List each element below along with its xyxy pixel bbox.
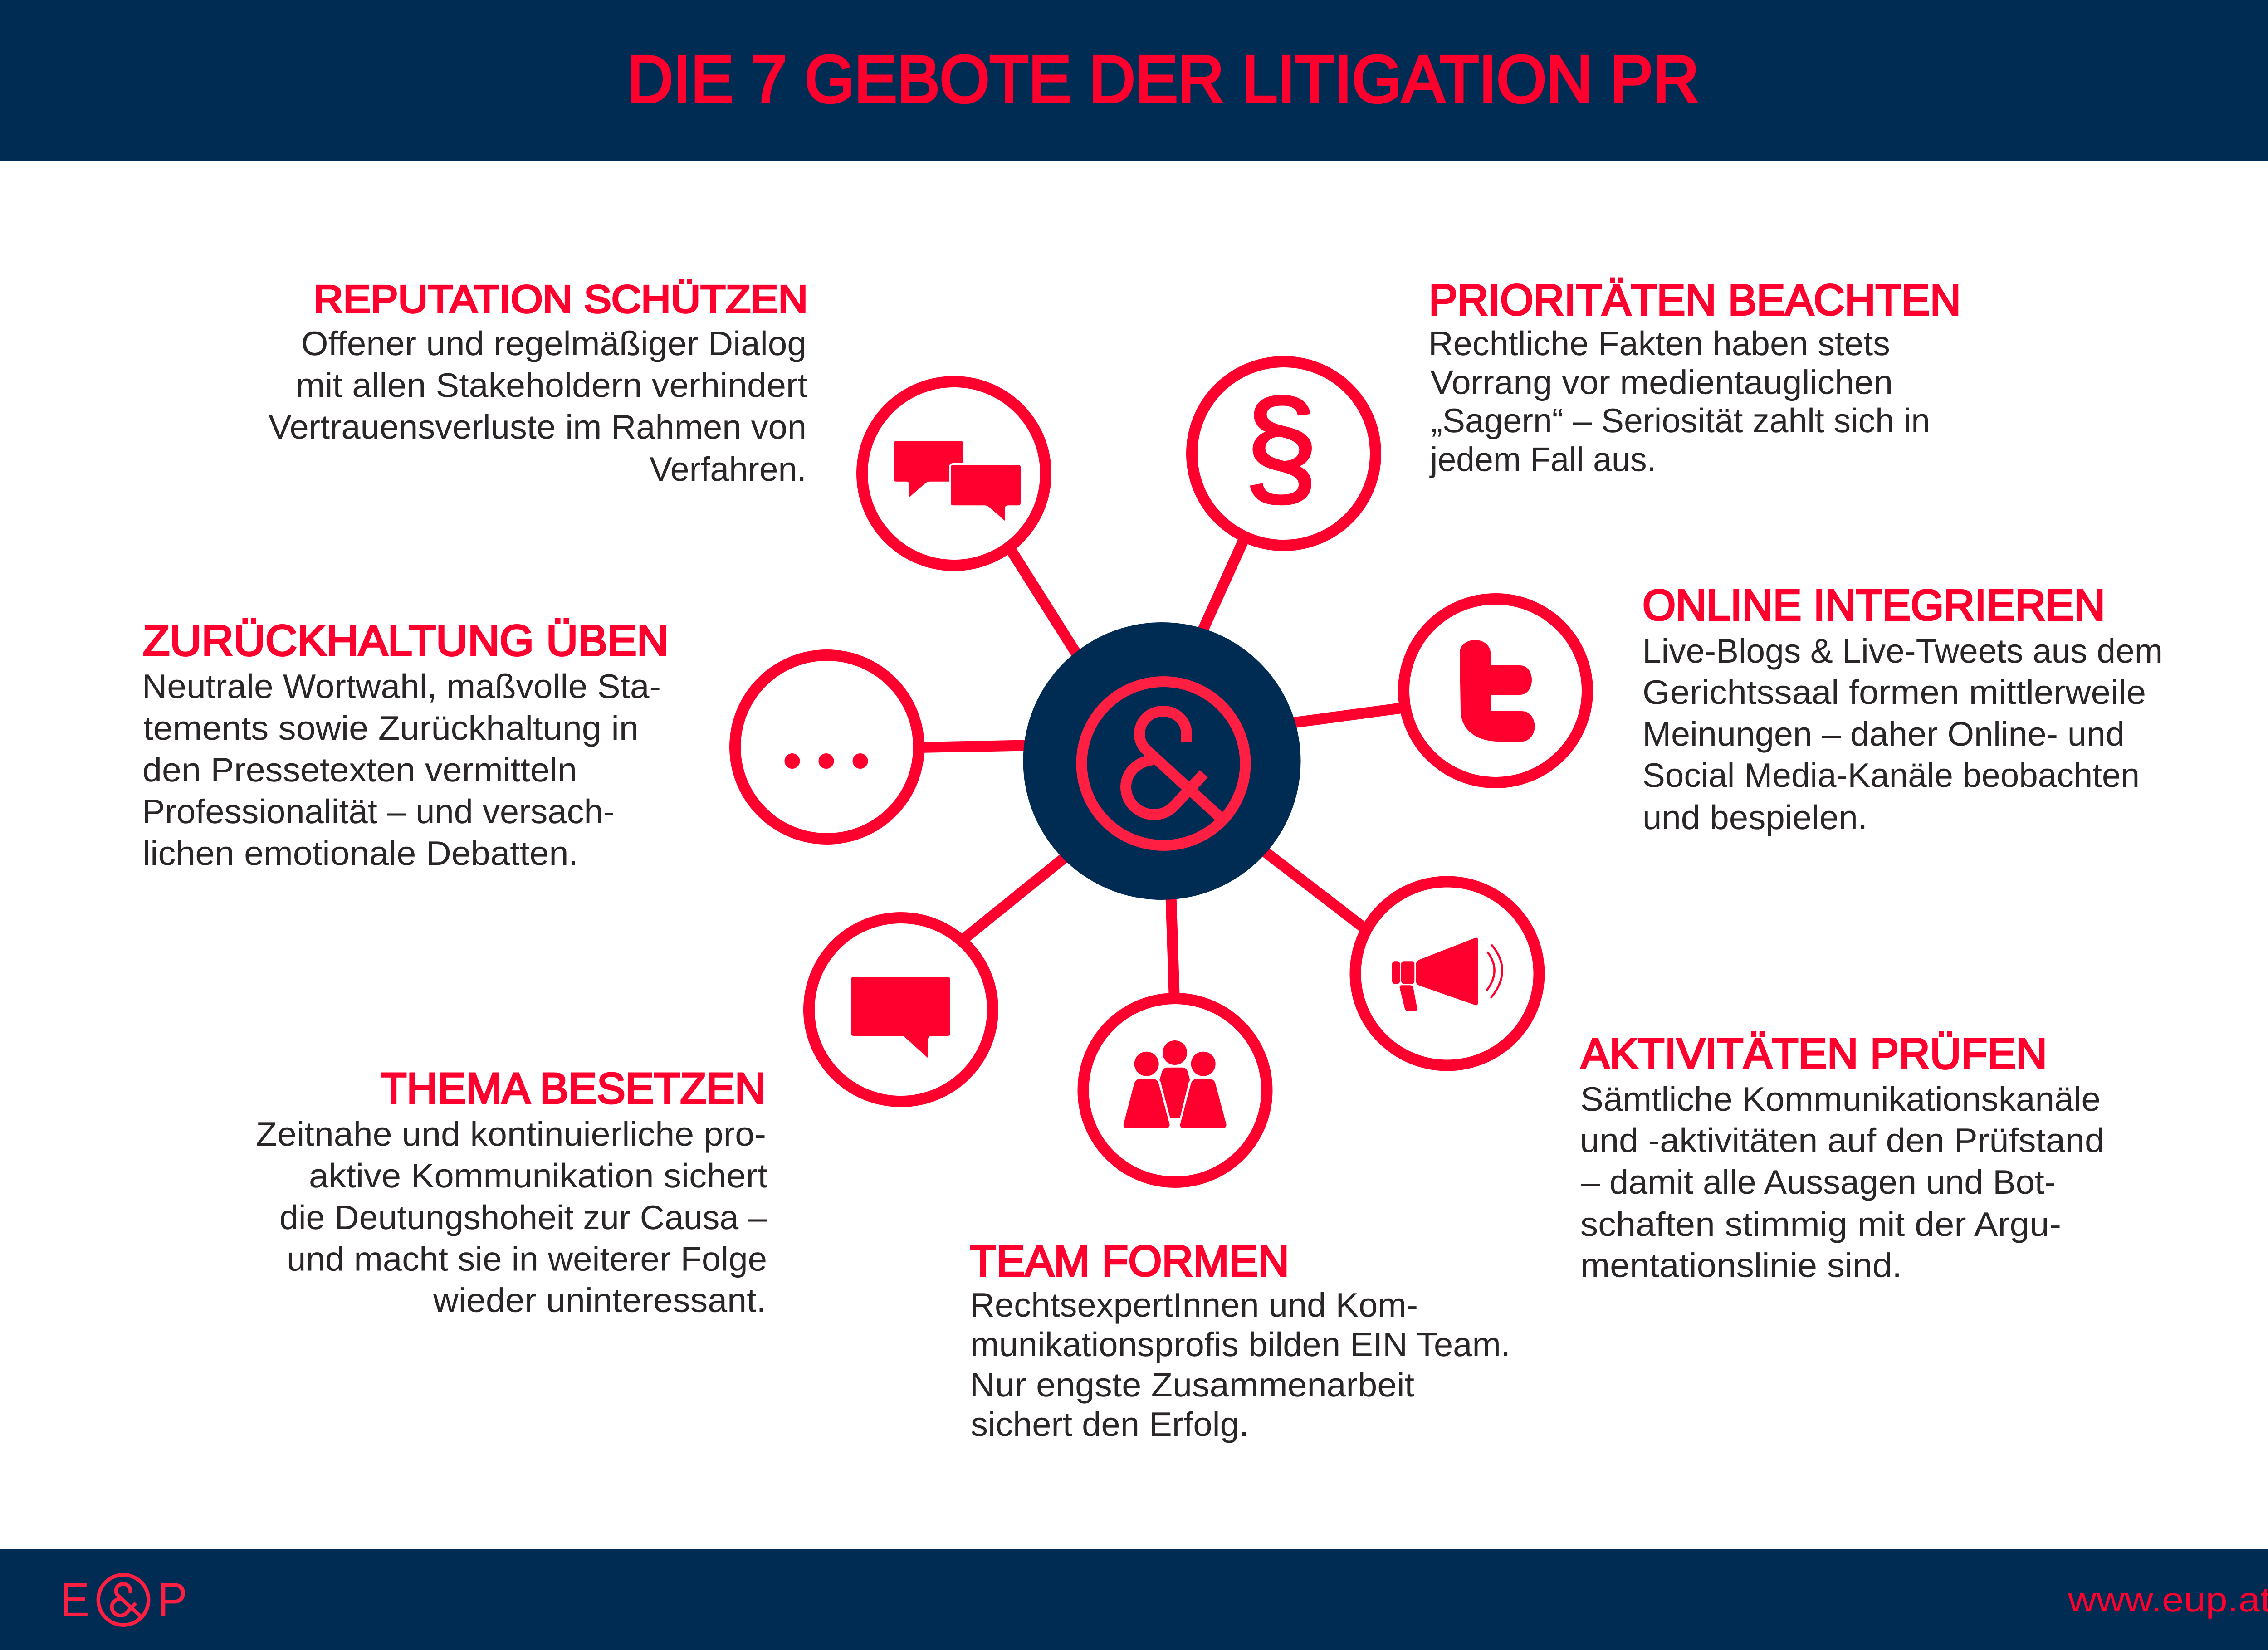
body text: und bespielen. [1642,798,1867,836]
body text [256,1115,767,1319]
body text: „Sagern“ – Seriosität zahlt sich in [1431,401,1930,439]
logo: E and P [60,1572,187,1627]
body text [269,324,807,488]
body text: aktive Kommunikation sichert [309,1157,767,1195]
icon: speech bubble [809,918,992,1101]
panel: Zurückhaltung üben [142,616,669,872]
body text: Neutrale Wortwahl, maßvolle Sta- [142,667,661,705]
body text: jedem Fall aus. [1429,440,1656,478]
body text: mentationslinie sind. [1580,1246,1902,1284]
icon: twitter t [1403,599,1588,783]
body text: Vertrauensverluste im Rahmen von [269,408,807,446]
body text: Rechtliche Fakten haben stets [1428,324,1890,362]
body text: Zeitnahe und kontinuierliche pro- [256,1115,766,1153]
heading: AKTIVITÄTEN PRÜFEN [1581,1030,2047,1078]
panel: Reputation schützen [269,278,808,488]
body text: mit allen Stakeholdern verhindert [296,366,807,404]
heading: TEAM FORMEN [970,1237,1289,1285]
body text: – damit alle Aussagen und Bot- [1581,1163,2056,1201]
panel: Online integrieren [1642,581,2163,836]
body text [142,667,661,872]
logo: E and P: P [157,1572,187,1627]
panel: Thema besetzen [256,1064,767,1319]
footer band [0,1549,2268,1650]
body text [1580,1080,2104,1284]
body text: Live-Blogs & Live-Tweets aus dem [1642,632,2163,670]
body text: Verfahren. [650,450,807,488]
body text: wieder uninteressant. [433,1281,766,1319]
body text: lichen emotionale Debatten. [142,834,578,872]
body text: Meinungen – daher Online- und [1642,715,2125,753]
icon: three dots [735,655,919,839]
connector lines [908,531,1415,1008]
icon: team [1083,999,1267,1182]
header band [0,0,2268,161]
title: DIE 7 GEBOTE DER LITIGATION PR [627,42,1699,117]
body text [970,1286,1510,1443]
body text: Gerichtssaal formen mittlerweile [1642,673,2146,711]
body text: RechtsexpertInnen und Kom- [970,1286,1418,1324]
icon: paragraph sign [1192,362,1375,545]
body text [1642,632,2163,836]
body text [1428,324,1930,478]
body text: munikationsprofis bilden EIN Team. [970,1325,1510,1363]
website url: www.eup.at [2068,1581,2268,1619]
body text: den Pressetexten vermitteln [142,751,577,789]
heading: ZURÜCKHALTUNG ÜBEN [143,616,669,665]
body text: und macht sie in weiterer Folge [287,1240,767,1278]
body text: tements sowie Zurückhaltung in [143,709,639,747]
heading: THEMA BESETZEN [381,1064,766,1113]
central hub with ampersand logo [1023,622,1301,900]
body text: Professionalität – und versach- [142,792,615,830]
body text: schaften stimmig mit der Argu- [1580,1205,2061,1243]
body text: Sämtliche Kommunikationskanäle [1580,1080,2101,1118]
heading: PRIORITÄTEN BEACHTEN [1429,276,1961,324]
panel: Aktivitäten prüfen [1580,1030,2104,1284]
icon: megaphone [1355,882,1539,1065]
body text: sichert den Erfolg. [971,1405,1249,1443]
body text: Nur engste Zusammenarbeit [970,1366,1414,1404]
icon: paragraph sign: § [1244,372,1318,522]
heading: ONLINE INTEGRIEREN [1642,581,2105,630]
body text: die Deutungshoheit zur Causa – [279,1198,767,1236]
body text: Social Media-Kanäle beobachten [1642,756,2140,794]
body text: Vorrang vor medientauglichen [1430,363,1893,401]
body text: und -aktivitäten auf den Prüfstand [1580,1121,2104,1159]
panel: Prioritäten beachten [1428,276,1961,478]
logo: E and P: E [60,1572,89,1627]
panel: Team formen [970,1237,1510,1443]
body text: Offener und regelmäßiger Dialog [301,324,807,362]
icon: chat bubbles [862,382,1046,565]
heading: REPUTATION SCHÜTZEN [313,278,808,321]
